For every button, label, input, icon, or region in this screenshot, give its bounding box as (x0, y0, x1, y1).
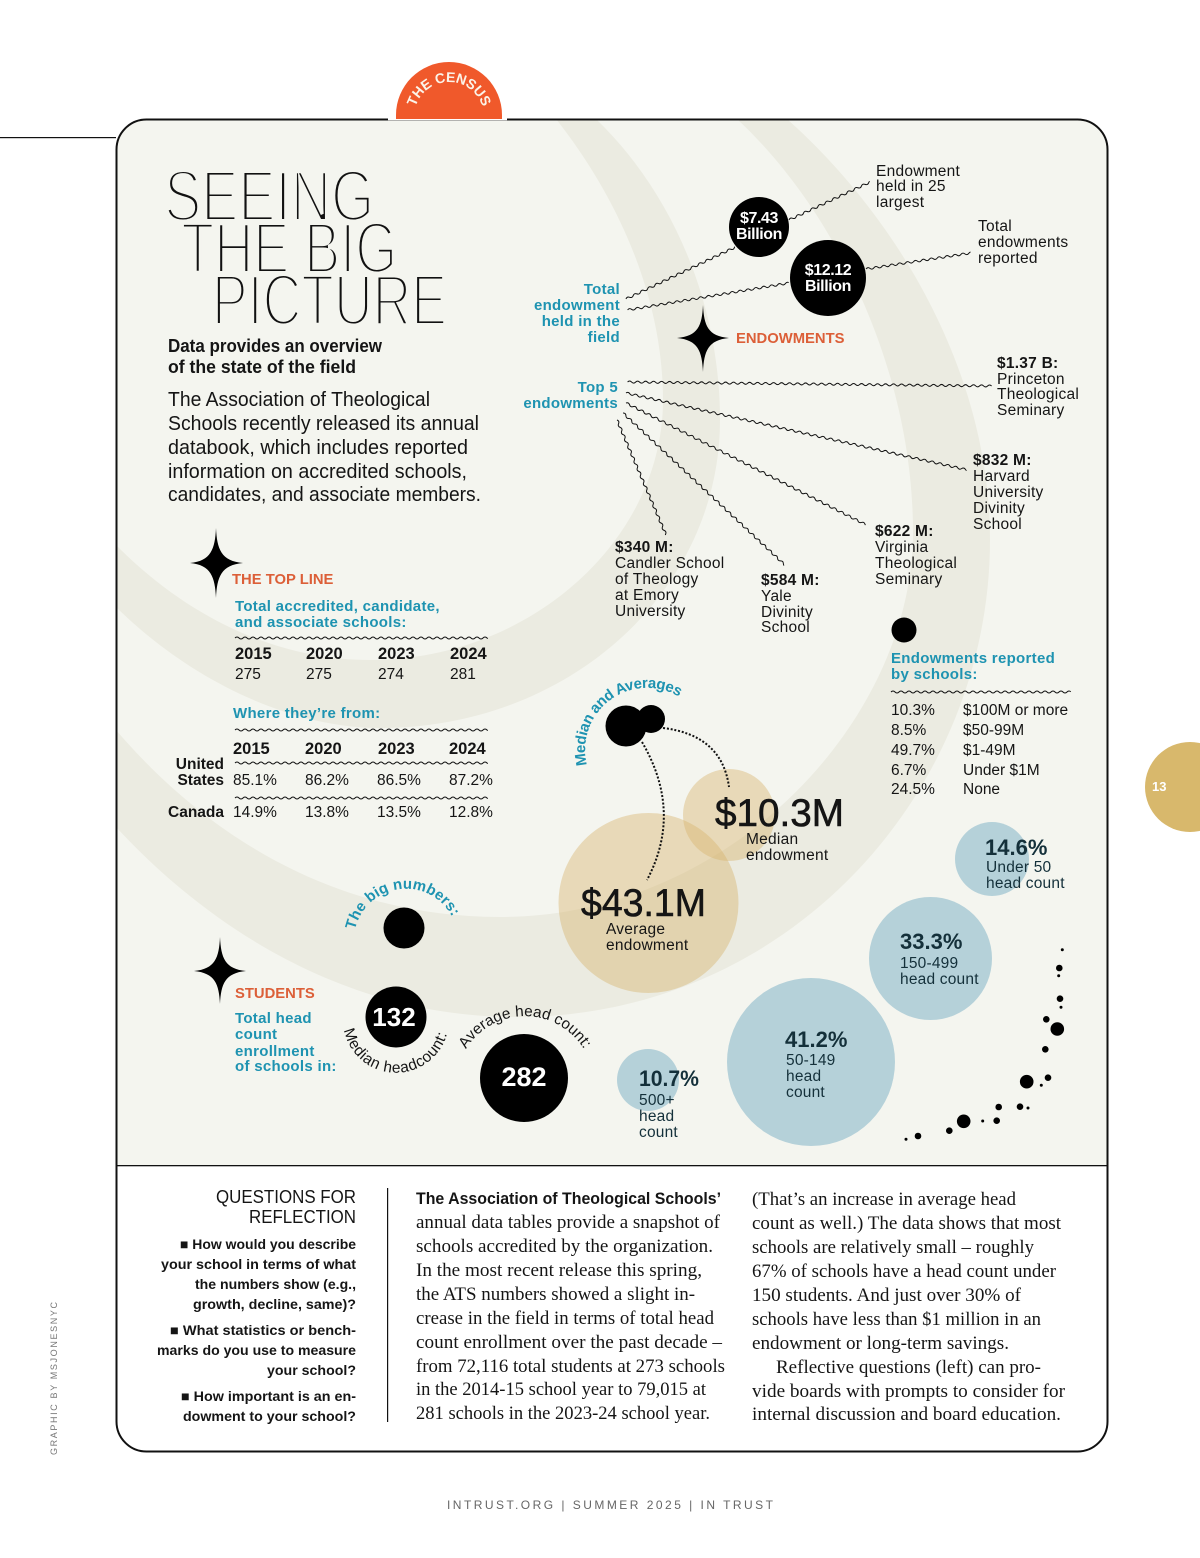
article column 2: schools have less than $1 million in an (752, 1309, 1041, 1330)
section: endowments reported by schools: 49.7% (891, 742, 935, 759)
section: median and averages: Average (606, 921, 665, 938)
decorative dots (904, 948, 1064, 1141)
title (164, 157, 447, 341)
icon: star (677, 305, 729, 372)
section: endowments: held in the (542, 313, 620, 330)
section: endowments: ENDOWMENTS (736, 331, 845, 347)
intro text: The Association of Theological (168, 389, 430, 411)
section: endowments: Theological (997, 386, 1079, 403)
bubble chart: head count distribution: Under 50 (986, 859, 1052, 876)
circle: median headcount (344, 986, 447, 1073)
dotted connectors (642, 728, 729, 880)
table: total schools: 2024 (450, 645, 488, 663)
section: median and averages: endowment (606, 937, 689, 954)
section: endowments reported by schools: 8.5% (891, 722, 927, 739)
table: where they're from: United (176, 756, 224, 773)
table: where they're from: 2015 (233, 740, 270, 758)
bubble chart: head count distribution: head count (900, 971, 979, 988)
table: where they're from: 14.9% (233, 804, 277, 821)
article column 1: 281 schools in the 2023-24 school year. (416, 1403, 710, 1424)
subtitle: Data provides an overview (168, 336, 383, 356)
footer: INTRUST.ORG | SUMMER 2025 | IN TRUST (447, 1498, 774, 1512)
section: median and averages: $43.1M (581, 882, 706, 925)
table: where they're from (168, 740, 493, 821)
intro text: databook, which includes reported (168, 437, 468, 459)
section: endowments: held in 25 (876, 178, 946, 195)
bubble chart: head count distribution: head (639, 1108, 674, 1125)
title: SEEING (164, 157, 374, 237)
article column 2: 67% of schools have a head count under (752, 1261, 1057, 1282)
bubble chart: head count distribution: 50-149 (786, 1052, 835, 1069)
questions for reflection (157, 1187, 356, 1424)
section: students: of schools in: (235, 1058, 337, 1075)
table: total schools: 275 (235, 666, 261, 683)
article column 1: from 72,116 total students at 273 schools (416, 1356, 725, 1377)
table: where they're from: Canada (168, 804, 224, 821)
table: where they're from: 2020 (305, 740, 342, 758)
section: endowments: School (973, 516, 1022, 533)
section: median and averages: Median and Averages (574, 680, 682, 766)
section: median and averages: Median (746, 831, 798, 848)
section: endowments reported by schools: $1-49M (963, 742, 1016, 759)
article column 2: count as well.) The data shows that most (752, 1213, 1062, 1234)
section: endowments: Harvard (973, 468, 1030, 485)
subtitle: of the state of the field (168, 357, 356, 377)
section: median and averages: $10.3M (715, 792, 844, 835)
section: endowments reported by schools: $50-99M (963, 722, 1024, 739)
questions for reflection: ■ How would you describe (180, 1236, 356, 1252)
bubble chart: head count distribution: head count (986, 875, 1065, 892)
section: endowments: Seminary (997, 402, 1064, 419)
article column 2: 150 students. And just over 30% of (752, 1285, 1022, 1306)
circle: 7.43 billion: Billion (736, 226, 782, 243)
bubble chart: head count distribution: 10.7% (639, 1066, 699, 1091)
panel outline (116, 117, 1108, 1452)
table: where they're from: 2024 (449, 740, 487, 758)
section: endowments reported by schools: Endowments reported (891, 650, 1055, 667)
section: endowments: endowments (523, 395, 618, 412)
questions for reflection: ■ How important is an en- (181, 1388, 356, 1404)
bubble chart: head count distribution: 150-499 (900, 955, 958, 972)
article column 1: the ATS numbers showed a slight in- (416, 1284, 695, 1305)
section: endowments: of Theology (615, 571, 698, 588)
circle: average head count: 282 (501, 1062, 547, 1092)
circle: 12.12 billion (790, 240, 866, 316)
bubble chart: head count distribution (617, 822, 1065, 1146)
section: median and averages: endowment (746, 847, 829, 864)
page rule left of panel (0, 137, 116, 138)
section: endowments: Top 5 (578, 379, 618, 396)
section: endowments reported by schools: $100M or more (963, 702, 1068, 719)
section: endowments (523, 44, 1200, 799)
section: endowments: Total (978, 218, 1012, 235)
section: endowments: $340 M: (615, 539, 674, 556)
badge: the census: THE CENSUS (406, 72, 490, 106)
table: where they're from: 12.8% (449, 804, 493, 821)
article column 2: schools are relatively small – roughly (752, 1237, 1034, 1258)
intro text: information on accredited schools, (168, 461, 467, 483)
section: endowments: endowments (978, 234, 1068, 251)
article column 1 (416, 1190, 725, 1424)
article column 2: (That’s an increase in average head (752, 1189, 1016, 1210)
questions for reflection: marks do you use to measure (157, 1342, 356, 1358)
circle: 7.43 billion: $7.43 (740, 210, 779, 227)
section: top line: THE TOP LINE (232, 572, 334, 588)
questions for reflection: growth, decline, same)? (193, 1296, 356, 1312)
section: endowments: Total (584, 281, 620, 298)
section: students: enrollment (235, 1043, 315, 1060)
bubble chart: head count distribution: head (786, 1068, 821, 1085)
section: top line: Total accredited, candidate, (235, 598, 440, 615)
section: endowments: field (588, 329, 620, 346)
table: where they're from: 86.2% (305, 772, 349, 789)
graphic credit: GRAPHIC BY MSJONESNYC (49, 1302, 59, 1455)
table: where they're from: 13.8% (305, 804, 349, 821)
table: where they're from: 86.5% (377, 772, 421, 789)
bubble chart: head count distribution: 41.2% (785, 1027, 847, 1052)
connector lines (616, 44, 1200, 799)
bubble chart: head count distribution: 500+ (639, 1092, 675, 1109)
article column 2: Reflective questions (left) can pro- (776, 1357, 1041, 1378)
icon: star (190, 528, 243, 598)
title: PICTURE (212, 261, 447, 341)
article column 2: vide boards with prompts to consider for (752, 1381, 1066, 1402)
circle: 12.12 billion: $12.12 (805, 262, 852, 279)
section: endowments: reported (978, 250, 1038, 267)
section: top line (168, 528, 647, 821)
section: endowments: $584 M: (761, 572, 820, 589)
table: total schools: 281 (450, 666, 476, 683)
questions for reflection: dowment to your school? (183, 1408, 356, 1424)
circle: 12.12 billion: Billion (805, 278, 851, 295)
section: endowments: Princeton (997, 371, 1065, 388)
section: endowments: Theological (875, 555, 957, 572)
table: where they're from: States (177, 772, 224, 789)
section: students: count (235, 1026, 277, 1043)
section: endowments: Candler School (615, 555, 724, 572)
title: THE BIG (181, 209, 397, 289)
article column 1: In the most recent release this spring, (416, 1260, 702, 1281)
article column 2 (752, 1189, 1066, 1425)
section: endowments reported by schools: Under $1M (963, 762, 1040, 779)
section: endowments: School (761, 619, 810, 636)
table: total schools: 2015 (235, 645, 272, 663)
table: total schools: 2020 (306, 645, 343, 663)
section: top line: Where they’re from: (233, 705, 380, 722)
article column 2: internal discussion and board education. (752, 1404, 1061, 1425)
section: endowments reported by schools: 24.5% (891, 781, 935, 798)
questions for reflection: the numbers show (e.g., (195, 1276, 356, 1292)
section: students: Total head (235, 1010, 312, 1027)
section: students (194, 880, 590, 1122)
intro text: Schools recently released its annual (168, 413, 479, 435)
section: students: STUDENTS (235, 986, 315, 1002)
section: endowments: Endowment (876, 163, 961, 180)
article column 1: schools accredited by the organization. (416, 1236, 713, 1257)
circle: median headcount: Median headcount: (344, 1028, 447, 1073)
subtitle (168, 336, 383, 377)
bubble chart: head count distribution: 14.6% (985, 835, 1047, 860)
article column 1: in the 2014-15 school year to 79,015 at (416, 1379, 707, 1400)
intro text (168, 389, 481, 506)
section: endowments reported by schools: by schools: (891, 666, 978, 683)
table: where they're from: 2023 (378, 740, 415, 758)
badge: the census (396, 62, 502, 119)
section: endowments: Seminary (875, 571, 942, 588)
article column 1: The Association of Theological Schools’ (416, 1190, 721, 1208)
section: endowments: largest (876, 194, 925, 211)
section: endowments: Divinity (761, 604, 813, 621)
section: endowments: University (973, 484, 1044, 501)
table: total schools (235, 645, 488, 683)
section: endowments: at Emory (615, 587, 679, 604)
bubble chart: head count distribution: 33.3% (900, 929, 962, 954)
section: endowments: University (615, 603, 686, 620)
circle: median headcount: 132 (372, 1002, 416, 1032)
page tab: 13 (1145, 742, 1200, 832)
section: endowments: $1.37 B: (997, 355, 1058, 372)
article column 1: crease in the field in terms of total head (416, 1308, 714, 1329)
table: where they're from: 87.2% (449, 772, 493, 789)
circle: 7.43 billion (729, 197, 789, 257)
section: endowments reported by schools (891, 618, 1200, 798)
questions for reflection: QUESTIONS FOR (216, 1187, 356, 1207)
panel: infographic background (116, 119, 1108, 1165)
questions for reflection: REFLECTION (249, 1207, 356, 1227)
section: endowments: $832 M: (973, 452, 1032, 469)
section: endowments: Divinity (973, 500, 1025, 517)
bubble chart: head count distribution: count (639, 1124, 678, 1141)
article column 1: count enrollment over the past decade – (416, 1332, 722, 1353)
icon: star (194, 937, 246, 1004)
section: students: The big numbers: (345, 880, 458, 928)
intro text: candidates, and associate members. (168, 484, 481, 506)
table: where they're from: 13.5% (377, 804, 421, 821)
table: total schools: 2023 (378, 645, 415, 663)
questions for reflection: your school? (267, 1362, 356, 1378)
section: endowments: endowment (534, 297, 620, 314)
questions for reflection: your school in terms of what (161, 1256, 356, 1272)
article column 1: annual data tables provide a snapshot of (416, 1212, 721, 1233)
table: total schools: 275 (306, 666, 332, 683)
section: endowments: Yale (761, 588, 792, 605)
questions for reflection: ■ What statistics or bench- (170, 1322, 356, 1338)
table: total schools: 274 (378, 666, 404, 683)
table: where they're from: 85.1% (233, 772, 277, 789)
circles: average and median endowment (558, 769, 775, 993)
bubble chart: head count distribution: count (786, 1084, 825, 1101)
circle: average head count: Average head count: (460, 1005, 590, 1050)
circle: average head count (460, 1005, 590, 1122)
section: endowments: Virginia (875, 539, 929, 556)
article column 2: endowment or long-term savings. (752, 1333, 1009, 1354)
section: endowments: $622 M: (875, 523, 934, 540)
section: endowments reported by schools: 10.3% (891, 702, 935, 719)
section: top line: and associate schools: (235, 614, 407, 631)
section: endowments reported by schools: 6.7% (891, 762, 927, 779)
section: endowments reported by schools: None (963, 781, 1000, 798)
section: median and averages (558, 680, 844, 993)
page tab: 13: 13 (1152, 779, 1166, 794)
